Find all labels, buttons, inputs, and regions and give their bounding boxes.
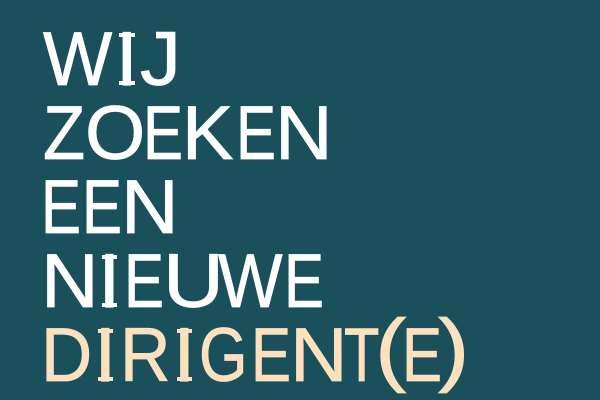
line: ZOEKEN: N [275,91,333,176]
line: ZOEKEN [43,91,333,176]
line: EEN: E [41,165,81,250]
line: NIEUWE: I [99,239,120,324]
line: WIJ: W [43,17,112,102]
line: DIRIGENT(E): ) [438,303,470,394]
line: NIEUWE: E [124,239,164,324]
line: WIJ [42,17,181,102]
line: DIRIGENT(E): I [174,313,195,398]
line: NIEUWE: N [41,239,98,324]
line: ZOEKEN: E [236,91,276,176]
line: WIJ: I [116,17,137,102]
line: NIEUWE: U [163,239,224,324]
line: ZOEKEN: K [182,91,233,176]
line: ZOEKEN: E [143,91,183,176]
line: NIEUWE: W [218,239,282,324]
line: DIRIGENT(E): R [120,313,170,398]
line: DIRIGENT(E): G [199,313,248,398]
line: DIRIGENT(E): N [290,313,348,398]
line: EEN [41,165,179,250]
line: DIRIGENT(E): I [95,313,116,398]
line: DIRIGENT(E): ( [375,303,407,394]
line: WIJ: J [140,17,181,102]
line: DIRIGENT(E): E [402,313,442,398]
line: DIRIGENT(E) [41,303,470,398]
line: NIEUWE: E [284,239,324,324]
line: NIEUWE [41,239,324,324]
line: ZOEKEN: Z [43,91,85,176]
line: EEN: N [121,165,179,250]
line: DIRIGENT(E): T [344,313,379,398]
line: ZOEKEN: O [85,91,146,176]
line: EEN: E [82,165,122,250]
headline [41,17,470,398]
line: DIRIGENT(E): E [251,313,291,398]
line: DIRIGENT(E): D [41,313,92,398]
